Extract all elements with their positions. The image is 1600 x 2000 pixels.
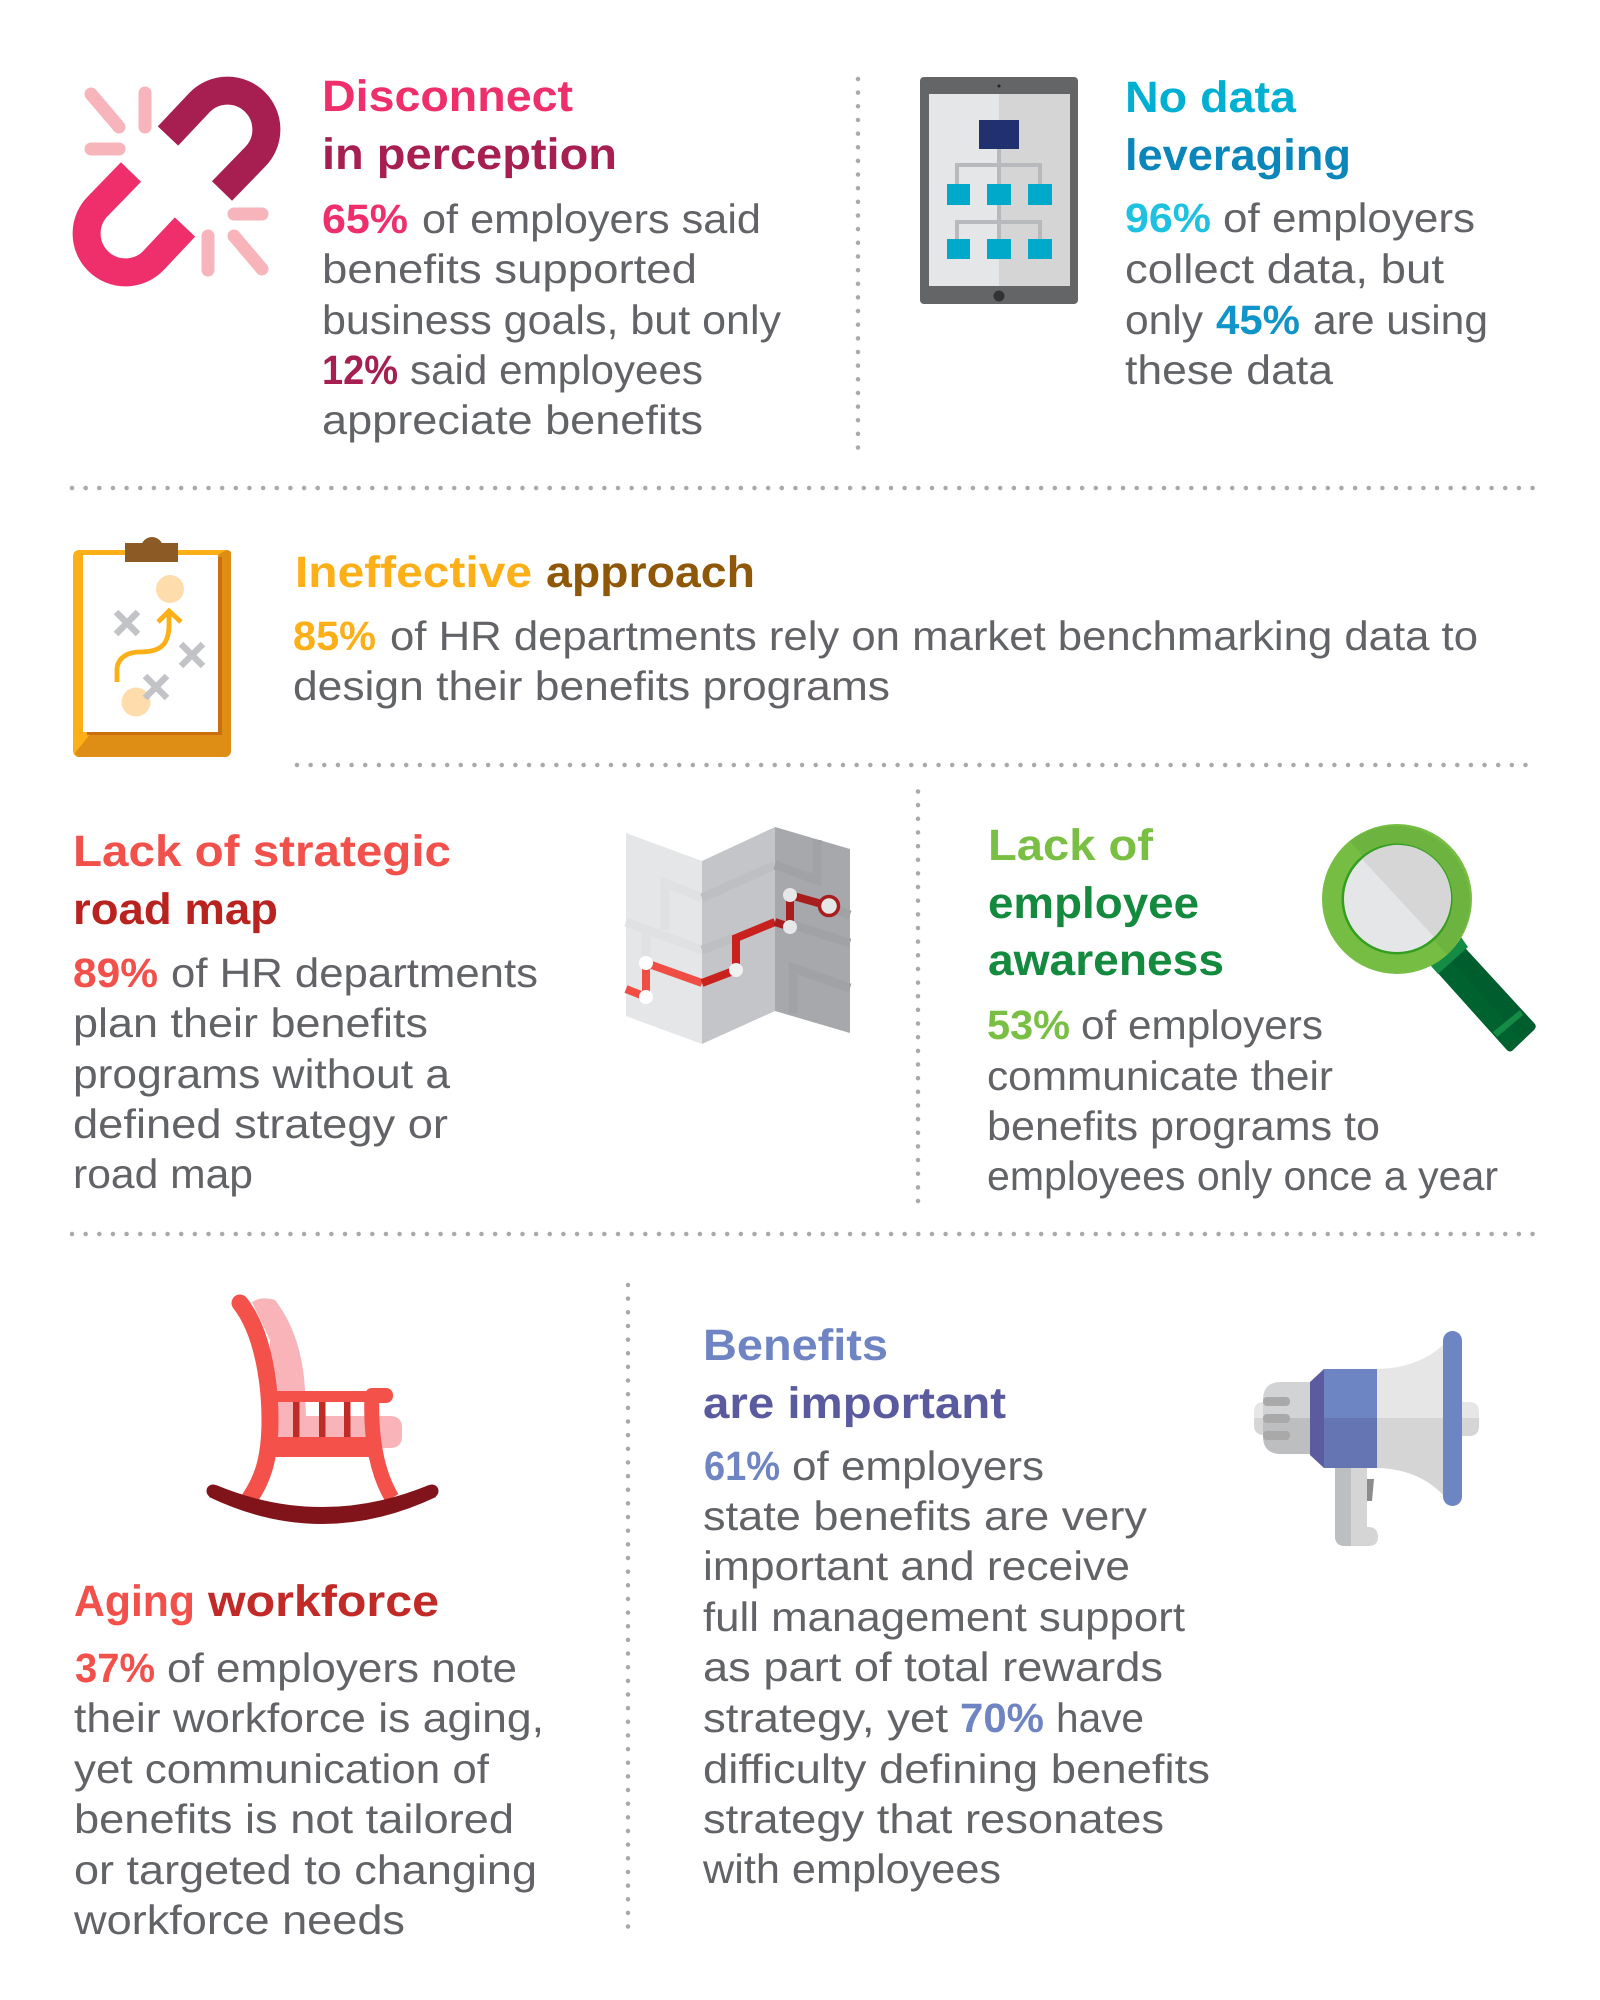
body text: benefits supported (322, 246, 697, 292)
body text: 70% (960, 1695, 1044, 1741)
body text: yet communication of (74, 1746, 490, 1792)
icon: megaphone (1254, 1331, 1479, 1546)
body text: of employers (1223, 195, 1475, 241)
body text: benefits is not tailored (74, 1796, 514, 1842)
body text: 45% (1216, 297, 1300, 343)
body text: their workforce is aging, (74, 1695, 544, 1741)
panel: lack of employee awareness (987, 821, 1536, 1199)
body text: appreciate benefits (322, 397, 703, 443)
body text: business goals, but only (322, 297, 782, 343)
body text: benefits programs to (987, 1103, 1380, 1149)
body text: road map (73, 1151, 253, 1197)
body text: 37% (75, 1645, 155, 1691)
body text: full management support (703, 1594, 1186, 1640)
body text: with employees (702, 1846, 1001, 1892)
body text: strategy, yet (703, 1695, 949, 1741)
heading: approach (546, 548, 755, 597)
body text: only (1125, 297, 1204, 343)
body text: 61% (704, 1443, 780, 1489)
heading: Lack of (988, 821, 1153, 870)
body text: of employers said (422, 196, 761, 242)
heading: Lack of strategic (73, 827, 451, 876)
heading: No data (1125, 73, 1297, 122)
panel: ineffective approach (73, 537, 1478, 757)
icon: clipboard with play diagram (73, 537, 231, 757)
body text: design their benefits programs (293, 663, 890, 709)
heading: leveraging (1125, 131, 1351, 180)
panel: lack of strategic road map (73, 827, 850, 1197)
panel: aging workforce (73, 1298, 544, 1943)
body text: workforce needs (73, 1897, 405, 1943)
body text: 96% (1125, 195, 1211, 241)
heading: Benefits (703, 1321, 888, 1370)
heading: are important (703, 1379, 1006, 1428)
heading: Aging (74, 1577, 195, 1626)
body text: or targeted to changing (74, 1847, 537, 1893)
body text: of employers (1081, 1002, 1323, 1048)
body text: 65% (322, 196, 408, 242)
heading: Disconnect (322, 72, 573, 121)
body text: have (1056, 1695, 1144, 1741)
body text: of employers note (167, 1645, 517, 1691)
body text: plan their benefits (73, 1000, 428, 1046)
panel: no data leveraging (920, 73, 1488, 393)
body text: communicate their (987, 1053, 1333, 1099)
body text: 12% (322, 347, 398, 393)
body text: employees only once a year (987, 1153, 1498, 1199)
heading: workforce (207, 1577, 439, 1626)
heading: in perception (322, 130, 617, 179)
body text: strategy that resonates (703, 1796, 1164, 1842)
body text: defined strategy or (73, 1101, 448, 1147)
body text: collect data, but (1125, 246, 1445, 292)
body text: 85% (293, 613, 376, 659)
body text: programs without a (73, 1051, 450, 1097)
icon: broken chain link (87, 91, 266, 272)
body text: are using (1313, 297, 1488, 343)
icon: tablet with org chart (920, 77, 1078, 304)
body text: difficulty defining benefits (703, 1746, 1210, 1792)
heading: awareness (988, 936, 1224, 985)
body text: 89% (73, 950, 158, 996)
body text: these data (1125, 347, 1333, 393)
body text: important and receive (703, 1543, 1130, 1589)
body text: said employees (410, 347, 703, 393)
panel: disconnect in perception (87, 72, 782, 443)
heading: road map (73, 885, 278, 934)
heading: Ineffective (295, 548, 532, 597)
body text: state benefits are very (703, 1493, 1148, 1539)
icon: rocking chair (206, 1298, 438, 1524)
body text: of employers (792, 1443, 1044, 1489)
body text: of HR departments (171, 950, 538, 996)
body text: as part of total rewards (703, 1644, 1163, 1690)
body text: 53% (987, 1002, 1070, 1048)
icon: magnifying glass (1322, 824, 1536, 1052)
panel: benefits are important (702, 1321, 1479, 1892)
heading: employee (988, 879, 1199, 928)
icon: folded map with route (626, 827, 850, 1044)
body text: of HR departments rely on market benchmarking data to (390, 613, 1478, 659)
